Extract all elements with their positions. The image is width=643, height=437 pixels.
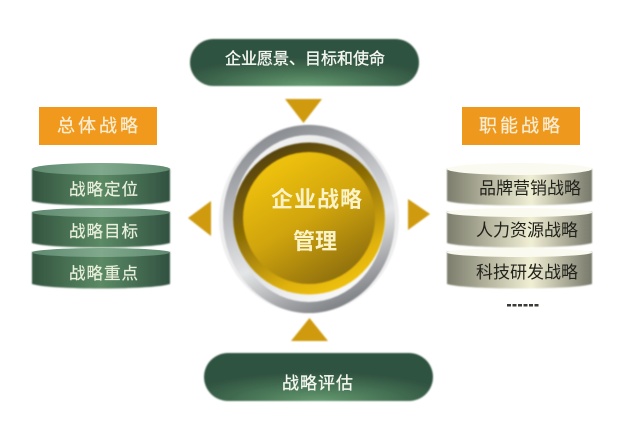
cylinder: strategy focus: 战略重点 <box>69 264 139 283</box>
cylinder: strategy goals: 战略目标 <box>69 222 139 241</box>
cylinder stack: overall strategy <box>32 163 170 288</box>
cylinder: human resources strategy <box>447 208 592 248</box>
cylinder: technology R&D strategy: 科技研发战略 <box>476 263 578 282</box>
pill: enterprise vision, goals and mission: 企业愿景、目标和使命 <box>225 50 385 68</box>
arrow: up toward circle <box>291 318 328 341</box>
banner: overall strategy: 总体战略 <box>57 116 141 136</box>
cylinder: technology R&D strategy <box>447 248 592 288</box>
banner: functional strategy <box>462 107 580 145</box>
arrow: left from circle <box>188 201 211 236</box>
arrow: right from circle <box>408 199 430 230</box>
ellipsis dots <box>507 304 538 306</box>
pill: strategy evaluation <box>204 353 433 401</box>
arrow: down from top pill <box>285 99 322 123</box>
cylinder: brand marketing strategy <box>447 163 592 206</box>
central circle: enterprise strategic management: 企业战略 <box>271 187 363 212</box>
banner: functional strategy: 职能战略 <box>479 116 563 136</box>
cylinder: brand marketing strategy: 品牌营销战略 <box>479 179 581 198</box>
pill: enterprise vision, goals and mission <box>190 39 419 86</box>
central circle: enterprise strategic management <box>219 124 399 314</box>
pill: strategy evaluation: 战略评估 <box>282 374 354 393</box>
cylinder stack: functional strategy <box>447 163 592 288</box>
cylinder: human resources strategy: 人力资源战略 <box>476 221 578 240</box>
central circle: enterprise strategic management: 管理 <box>293 229 337 254</box>
banner: overall strategy <box>39 107 157 145</box>
cylinder: strategy positioning: 战略定位 <box>69 180 139 199</box>
